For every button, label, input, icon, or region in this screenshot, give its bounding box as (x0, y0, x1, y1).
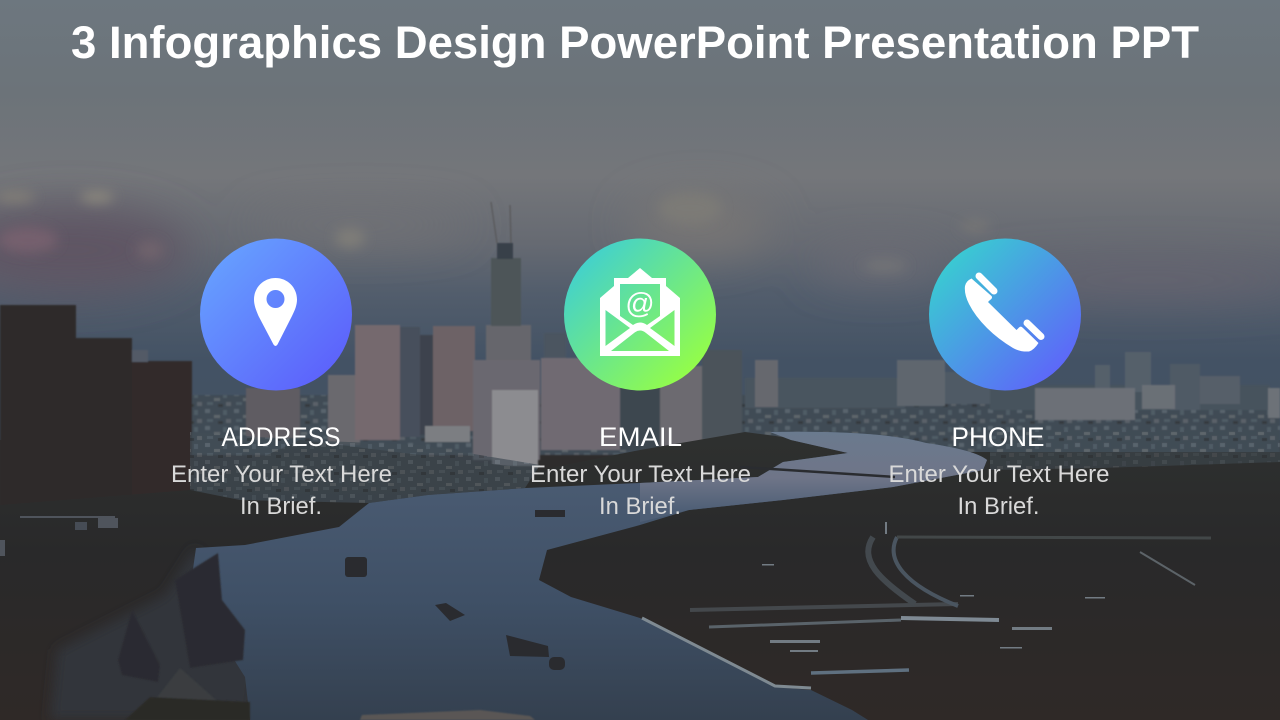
town specks left bank (190, 432, 540, 503)
text block: address: In Brief. (240, 493, 322, 520)
roads and embankment (642, 537, 1211, 688)
icon: telephone handset (929, 238, 1081, 390)
skyline far strip and buildings (0, 202, 1280, 515)
ships and boats (345, 510, 565, 670)
text block: address: Enter Your Text Here (171, 461, 392, 488)
heading: phone: PHONE (952, 422, 1044, 452)
text block: phone: In Brief. (958, 493, 1040, 520)
text block: email: In Brief. (599, 493, 681, 520)
upper river (640, 432, 987, 522)
icon: open envelope: @ (625, 288, 655, 320)
panel: address (171, 238, 392, 520)
icon: open envelope (564, 238, 716, 390)
left dark towers (0, 305, 192, 515)
heading: email: EMAIL (599, 422, 682, 452)
ground (0, 432, 1280, 720)
panel: phone (888, 238, 1110, 520)
panel: email (530, 238, 751, 520)
icon: location pin (200, 238, 352, 390)
text block: email: Enter Your Text Here (530, 461, 751, 488)
town specks lower left (0, 516, 118, 556)
heading: address: ADDRESS (222, 422, 340, 452)
central towers (246, 202, 742, 466)
far-city right (190, 352, 1280, 455)
white specks (762, 522, 1105, 652)
clouds (0, 197, 1280, 296)
river reflection dark (50, 548, 260, 720)
river main (190, 432, 987, 720)
title: 3 Infographics Design PowerPoint Presentation PPT (71, 17, 1199, 68)
text block: phone: Enter Your Text Here (888, 461, 1110, 488)
bridge (740, 467, 895, 477)
